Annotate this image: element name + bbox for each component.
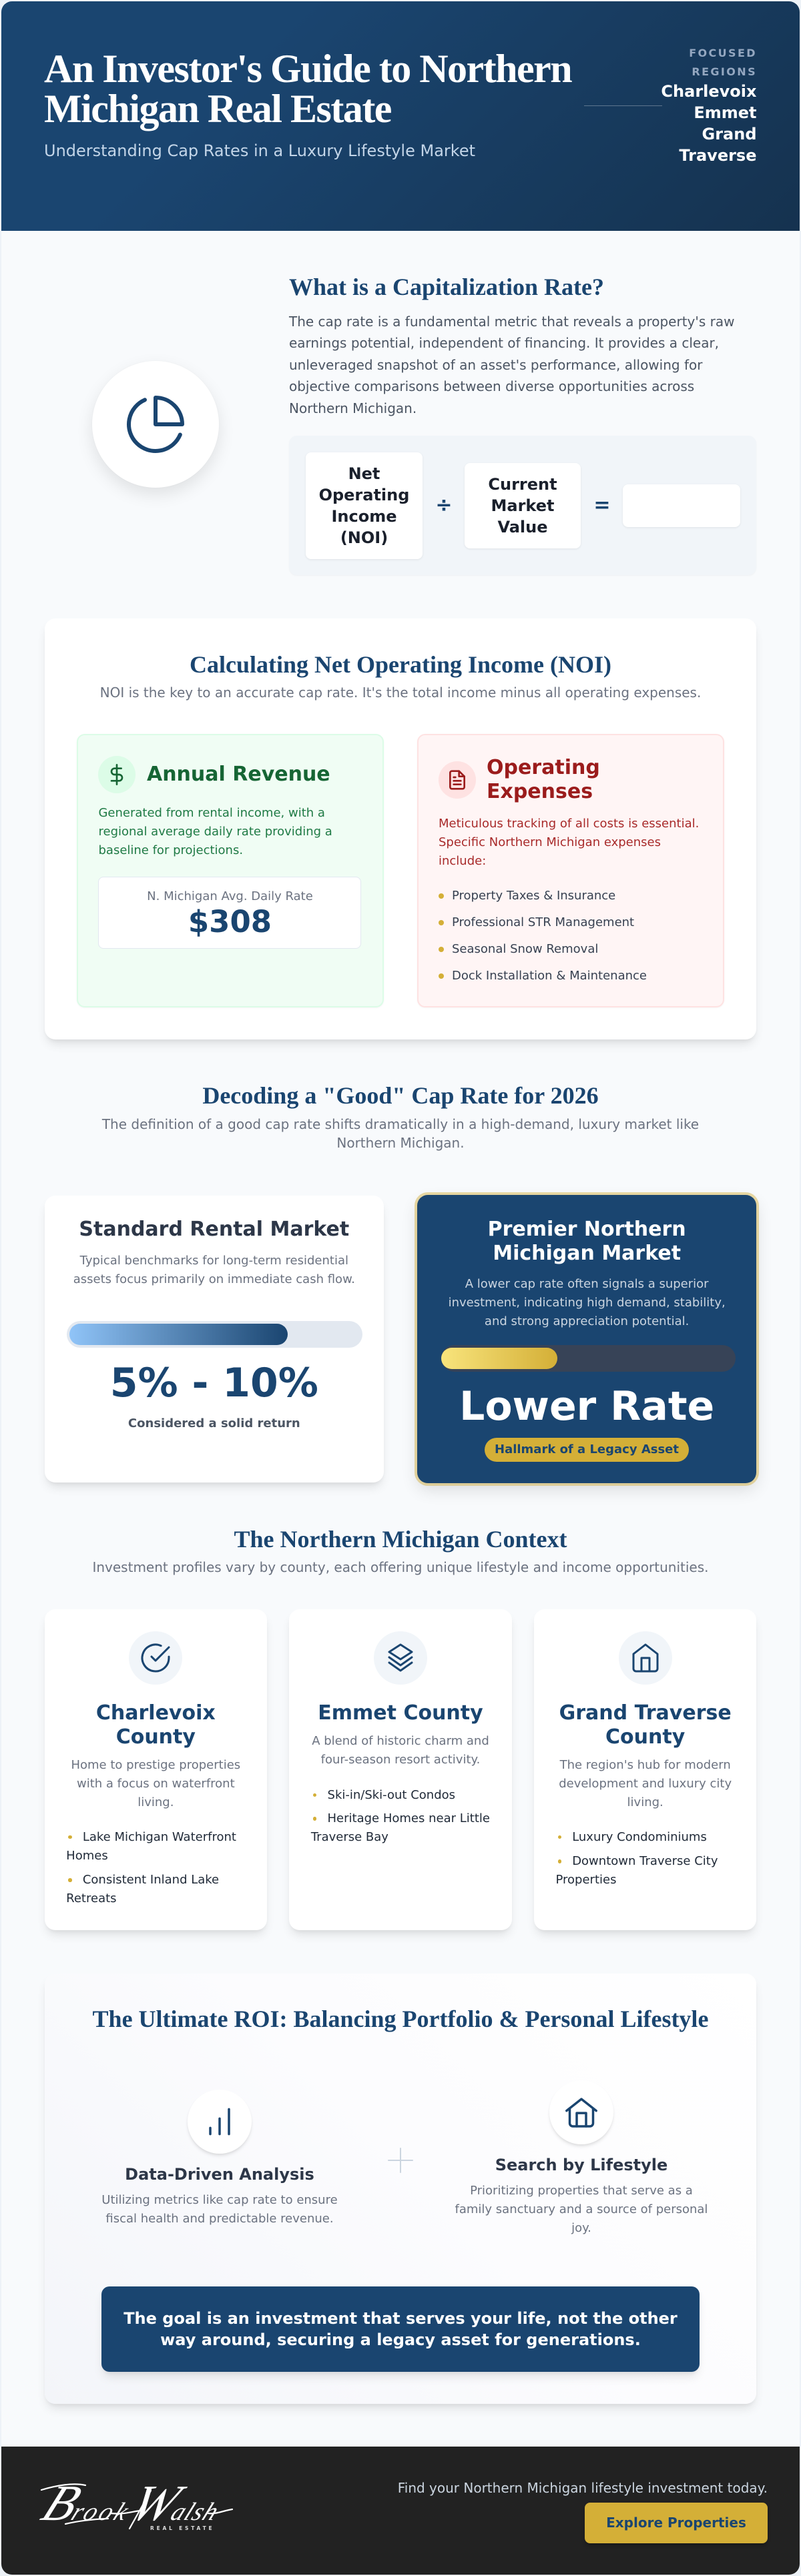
subheading: Investment profiles vary by county, each offering unique lifestyle and income opportunities. (92, 1559, 708, 1575)
rate bar (441, 1345, 736, 1372)
expenses description: Meticulous tracking of all costs is essential. (439, 817, 699, 831)
card description: and strong appreciation potential. (485, 1314, 689, 1328)
county description (559, 1758, 732, 1809)
list item: Traverse Bay (311, 1830, 388, 1844)
formula term: market value: Market (491, 496, 554, 515)
list item: Ski-in/Ski-out Condos (328, 1788, 455, 1801)
formula term: NOI: Income (331, 507, 396, 526)
stat label: N. Michigan Avg. Daily Rate (147, 889, 313, 903)
expenses description: Specific Northern Michigan expenses (439, 835, 661, 849)
focused regions label: REGIONS (692, 65, 757, 78)
title: An Investor's Guide to Northern (44, 47, 571, 91)
formula term: market value (465, 463, 581, 548)
revenue description (98, 806, 332, 857)
lifestyle description: joy. (571, 2221, 591, 2235)
county title: County (605, 1725, 685, 1748)
lifestyle description (455, 2184, 708, 2235)
panel: calculating NOI (45, 618, 756, 1039)
expenses description: include: (439, 854, 486, 868)
region names: Grand (702, 125, 757, 143)
card title (488, 1218, 686, 1265)
expenses title (487, 756, 600, 803)
county title (559, 1701, 732, 1748)
data analysis title: Data-Driven Analysis (125, 2165, 314, 2184)
focused regions label: FOCUSED (689, 47, 757, 59)
heading: The Ultimate ROI: Balancing Portfolio & Personal Lifestyle (93, 2006, 708, 2032)
region connector line (584, 105, 662, 106)
expense item: Professional STR Management (452, 915, 634, 929)
card description (449, 1277, 726, 1328)
formula (289, 436, 756, 575)
expense item: Seasonal Snow Removal (452, 942, 598, 956)
title (44, 47, 572, 131)
subheading: The definition of a good cap rate shifts dramatically in a high-demand, luxury market like (102, 1116, 699, 1132)
card description (73, 1254, 355, 1286)
expenses description (439, 817, 699, 868)
lifestyle description: Prioritizing properties that serve as a (470, 2184, 693, 2198)
callout: The goal is an investment that serves your life, not the other (123, 2309, 678, 2328)
panel: grand traverse county (534, 1609, 756, 1930)
county description: Home to prestige properties (71, 1758, 240, 1772)
description: objective comparisons between diverse opportunities across (289, 378, 694, 394)
callout (101, 2286, 700, 2372)
heading: What is a Capitalization Rate? (289, 274, 604, 300)
region names: Traverse (679, 146, 757, 165)
description: The cap rate is a fundamental metric that reveals a property's raw (289, 314, 734, 330)
section heading: context (92, 1526, 708, 1575)
expense item: Dock Installation & Maintenance (452, 969, 647, 983)
stat value: $308 (188, 904, 272, 939)
panel: operating expenses (417, 734, 724, 1007)
icon: check circle (129, 1631, 182, 1684)
button (585, 2503, 768, 2543)
lifestyle description: family sanctuary and a source of personal (455, 2202, 708, 2216)
panel: emmet county (289, 1609, 512, 1930)
title: Michigan Real Estate (44, 87, 391, 131)
county title (96, 1701, 216, 1748)
county title: Emmet County (318, 1701, 483, 1724)
icon: document (439, 761, 476, 799)
list item (311, 1811, 490, 1844)
description (288, 314, 734, 416)
list item (66, 1830, 236, 1863)
revenue description: baseline for projections. (98, 843, 243, 857)
logo tagline: REAL ESTATE (150, 2525, 214, 2531)
formula term: NOI: Net (348, 464, 380, 483)
footer (1, 2447, 800, 2575)
header banner (1, 1, 800, 231)
daily rate stat (98, 877, 361, 949)
icon: pie chart (92, 361, 219, 488)
formula term: NOI: Operating (319, 486, 409, 504)
subheading (101, 1116, 699, 1151)
expense item: Property Taxes & Insurance (452, 889, 615, 903)
panel: ultimate ROI (45, 1974, 756, 2404)
description: unleveraged snapshot of an asset's performance, allowing for (289, 357, 702, 373)
region names (661, 82, 757, 165)
county description: four-season resort activity. (321, 1753, 480, 1767)
card title: Premier Northern (488, 1218, 686, 1241)
heading: Decoding a "Good" Cap Rate for 2026 (202, 1082, 599, 1109)
formula term: market value: Value (497, 518, 548, 536)
county description: with a focus on waterfront (77, 1777, 235, 1791)
list item: Properties (555, 1873, 616, 1887)
subheading: NOI is the key to an accurate cap rate. It's the total income minus all operating expenses. (100, 685, 701, 701)
list item: Homes (66, 1849, 108, 1863)
card description: investment, indicating high demand, stability, (449, 1296, 726, 1310)
list item: Consistent Inland Lake (83, 1873, 219, 1887)
county description: The region's hub for modern (560, 1758, 731, 1772)
focused regions label (689, 47, 757, 78)
list item (555, 1854, 718, 1887)
icon: home (549, 2080, 613, 2144)
icon: bar chart (188, 2090, 252, 2154)
heading: Calculating Net Operating Income (NOI) (190, 651, 611, 678)
subheading: Northern Michigan. (336, 1135, 465, 1151)
button: Explore Properties (606, 2515, 746, 2531)
region names: Charlevoix (661, 82, 757, 101)
legacy badge (485, 1438, 689, 1462)
list item: Downtown Traverse City (572, 1854, 718, 1868)
data analysis description (101, 2193, 338, 2226)
panel: premier northern michigan market (417, 1195, 756, 1483)
description: earnings potential, independent of financing. It provides a clear, (289, 335, 719, 351)
list item (66, 1873, 219, 1905)
logo (33, 2480, 234, 2531)
icon: house (619, 1631, 672, 1684)
lifestyle title: Search by Lifestyle (495, 2156, 668, 2174)
formula result box (623, 484, 740, 527)
county title: Grand Traverse (559, 1701, 732, 1724)
county title: County (116, 1725, 196, 1748)
county description (312, 1734, 489, 1767)
heading: The Northern Michigan Context (234, 1526, 567, 1553)
logo swashes (41, 2484, 232, 2529)
call to action text: Find your Northern Michigan lifestyle investment today. (398, 2480, 768, 2496)
county description (71, 1758, 240, 1809)
expenses title: Expenses (487, 780, 593, 803)
card description: Typical benchmarks for long-term residential (80, 1254, 348, 1268)
panel: annual revenue (77, 734, 384, 1007)
card description: A lower cap rate often signals a superior (465, 1277, 709, 1291)
rate bar fill (441, 1348, 557, 1369)
county description: living. (627, 1795, 663, 1809)
panel: what is a cap rate (89, 274, 742, 561)
subtitle: Understanding Cap Rates in a Luxury Lifestyle Market (44, 141, 475, 160)
equals sign: = (593, 494, 611, 517)
card title: Michigan Market (493, 1242, 681, 1265)
formula term: NOI: (NOI) (340, 528, 388, 547)
expenses title: Operating (487, 756, 600, 779)
data analysis description: fiscal health and predictable revenue. (105, 2212, 334, 2226)
legacy badge: Hallmark of a Legacy Asset (495, 1442, 679, 1456)
list item: Lake Michigan Waterfront (83, 1830, 236, 1844)
county description: A blend of historic charm and (312, 1734, 489, 1748)
divide sign: ÷ (435, 494, 453, 517)
icon: plus (388, 2148, 413, 2173)
expense list (439, 889, 647, 983)
list item: Heritage Homes near Little (328, 1811, 490, 1825)
panel: charlevoix county (45, 1609, 267, 1930)
data analysis description: Utilizing metrics like cap rate to ensure (101, 2193, 338, 2207)
callout: way around, securing a legacy asset for generations. (160, 2330, 641, 2349)
revenue title: Annual Revenue (147, 763, 330, 786)
panel: standard rental market (45, 1196, 384, 1482)
county title: Charlevoix (96, 1701, 216, 1724)
list item: Luxury Condominiums (572, 1830, 707, 1844)
section heading: decoding (101, 1082, 699, 1151)
rate value: Lower Rate (459, 1383, 714, 1430)
revenue description: regional average daily rate providing a (98, 825, 332, 838)
formula term: market value: Current (488, 475, 557, 494)
card description: assets focus primarily on immediate cash flow. (73, 1272, 355, 1286)
county description: living. (138, 1795, 174, 1809)
card title: Standard Rental Market (79, 1218, 349, 1241)
formula term: NOI (306, 452, 423, 559)
rate caption: Considered a solid return (128, 1416, 300, 1430)
region names: Emmet (694, 103, 757, 122)
icon: dollar (98, 756, 136, 793)
revenue description: Generated from rental income, with a (98, 806, 325, 819)
list item: Retreats (66, 1891, 117, 1905)
rate value: 5% - 10% (110, 1360, 318, 1406)
icon: layers (374, 1631, 427, 1684)
description: Northern Michigan. (289, 400, 417, 416)
rate bar fill (69, 1324, 288, 1345)
county description: development and luxury city (559, 1777, 732, 1791)
rate bar (67, 1321, 362, 1348)
